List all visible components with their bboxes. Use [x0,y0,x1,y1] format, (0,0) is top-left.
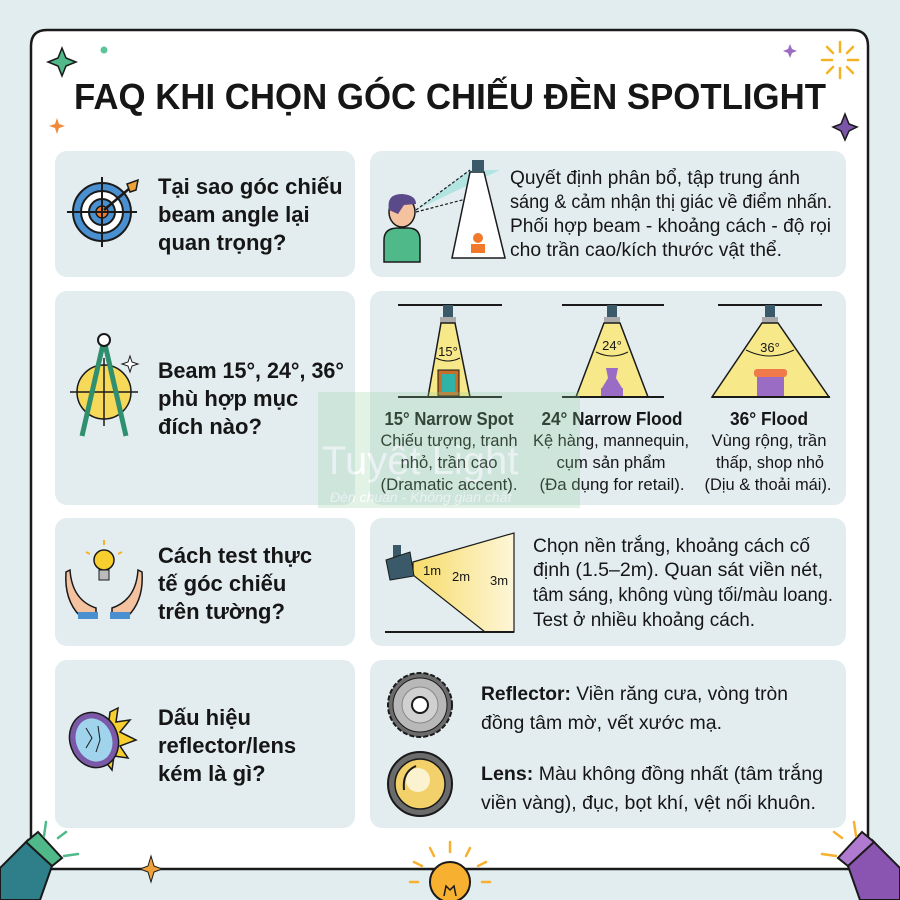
diagram: 24 narrow flood: 24° [602,338,622,353]
diagram: 15 narrow spot: (Dramatic accent). [380,475,518,494]
diagram: wall test: 3m [490,573,508,588]
answer text: cho trần cao/kích thước vật thể. [510,240,782,261]
answer text: Quyết định phân bổ, tập trung ánh [510,168,800,189]
panel: row 1 question [55,151,355,277]
diagram: 24 narrow flood: 24° Narrow Flood [542,409,682,429]
question text: Dấu hiệu [158,705,251,730]
answer text: sáng & cảm nhận thị giác về điểm nhấn. [510,192,832,213]
icon: cracked lens [62,705,136,775]
panel: row 4 question [55,660,355,828]
lens text: viền vàng), đục, bọt khí, vệt nối khuôn. [481,793,816,814]
watermark: Đèn chuẩn - Không gian chất [330,489,512,505]
answer text: Test ở nhiều khoảng cách. [533,610,755,631]
answer text: định (1.5–2m). Quan sát viền nét, [533,560,823,581]
question text: trên tường? [158,599,285,624]
icon: bulb in hands [66,540,142,619]
diagram: 24 narrow flood [533,305,689,494]
icon: bulb bottom [410,842,490,900]
panel: row 4 answer [370,660,846,828]
decorative sparkles [48,42,858,140]
question text: phù hợp mục [158,386,298,411]
diagram: 24 narrow flood: cụm sản phẩm [556,453,666,472]
diagram: 36 flood: 36° Flood [730,409,808,429]
diagram: 36 flood: (Dịu & thoải mái). [704,475,832,494]
diagram: 24 narrow flood: (Đa dụng for retail). [540,475,684,494]
diagram: 15 narrow spot: nhỏ, trần cao [400,453,498,472]
question text: kém là gì? [158,761,266,786]
panel: row 2 answer [370,291,846,505]
icon: target [67,177,138,247]
diagram: 36 flood: thấp, shop nhỏ [716,453,824,472]
answer text: Chọn nền trắng, khoảng cách cố [533,535,810,557]
question text: reflector/lens [158,733,296,758]
question text: Cách test thực [158,543,312,568]
diagram: 15 narrow spot: 15° Narrow Spot [384,409,514,429]
question text: quan trọng? [158,230,286,255]
watermark [318,392,580,508]
panel: row 2 question [55,291,355,505]
diagram: wall test [385,533,514,632]
title: FAQ KHI CHỌN GÓC CHIẾU ĐÈN SPOTLIGHT [74,75,826,117]
icon: flashlight right [822,822,900,900]
diagram: 15 narrow spot [380,305,518,494]
diagram: 15 narrow spot: Chiếu tượng, tranh [380,431,518,450]
icon: viewer and spotlight [384,160,505,262]
diagram: 36 flood: 36° [760,340,780,355]
watermark: Tuyệt Light [322,439,518,483]
panel: row 3 question [55,518,355,646]
answer text: tâm sáng, không vùng tối/màu loang. [533,585,833,606]
lens text: Lens: Màu không đồng nhất (tâm trắng [481,764,814,785]
reflector text: Reflector: Viền răng cưa, vòng tròn [481,684,785,705]
diagram: wall test: 2m [452,569,470,584]
icon: compass [70,334,138,436]
diagram: 36 flood: Vùng rộng, trần [712,431,826,450]
diagram: 24 narrow flood: Kệ hàng, mannequin, [533,431,689,450]
icon: sparkle bottom [140,856,162,882]
icon: flashlight left [0,822,78,900]
panel: row 3 answer [370,518,846,646]
reflector text: đồng tâm mờ, vết xước mạ. [481,713,722,734]
question text: Beam 15°, 24°, 36° [158,358,344,383]
answer text: Phối hợp beam - khoảng cách - độ rọi [510,216,831,237]
icon: reflector [388,673,452,737]
diagram: 36 flood [704,305,832,494]
panel: row 1 answer [370,151,846,277]
question text: Tại sao góc chiếu [158,174,343,199]
diagram: 15 narrow spot: 15° [438,344,458,359]
icon: lens [388,752,452,816]
diagram: wall test: 1m [423,563,441,578]
question text: beam angle lại [158,202,310,227]
question text: tế góc chiếu [158,571,286,596]
question text: đích nào? [158,414,262,439]
